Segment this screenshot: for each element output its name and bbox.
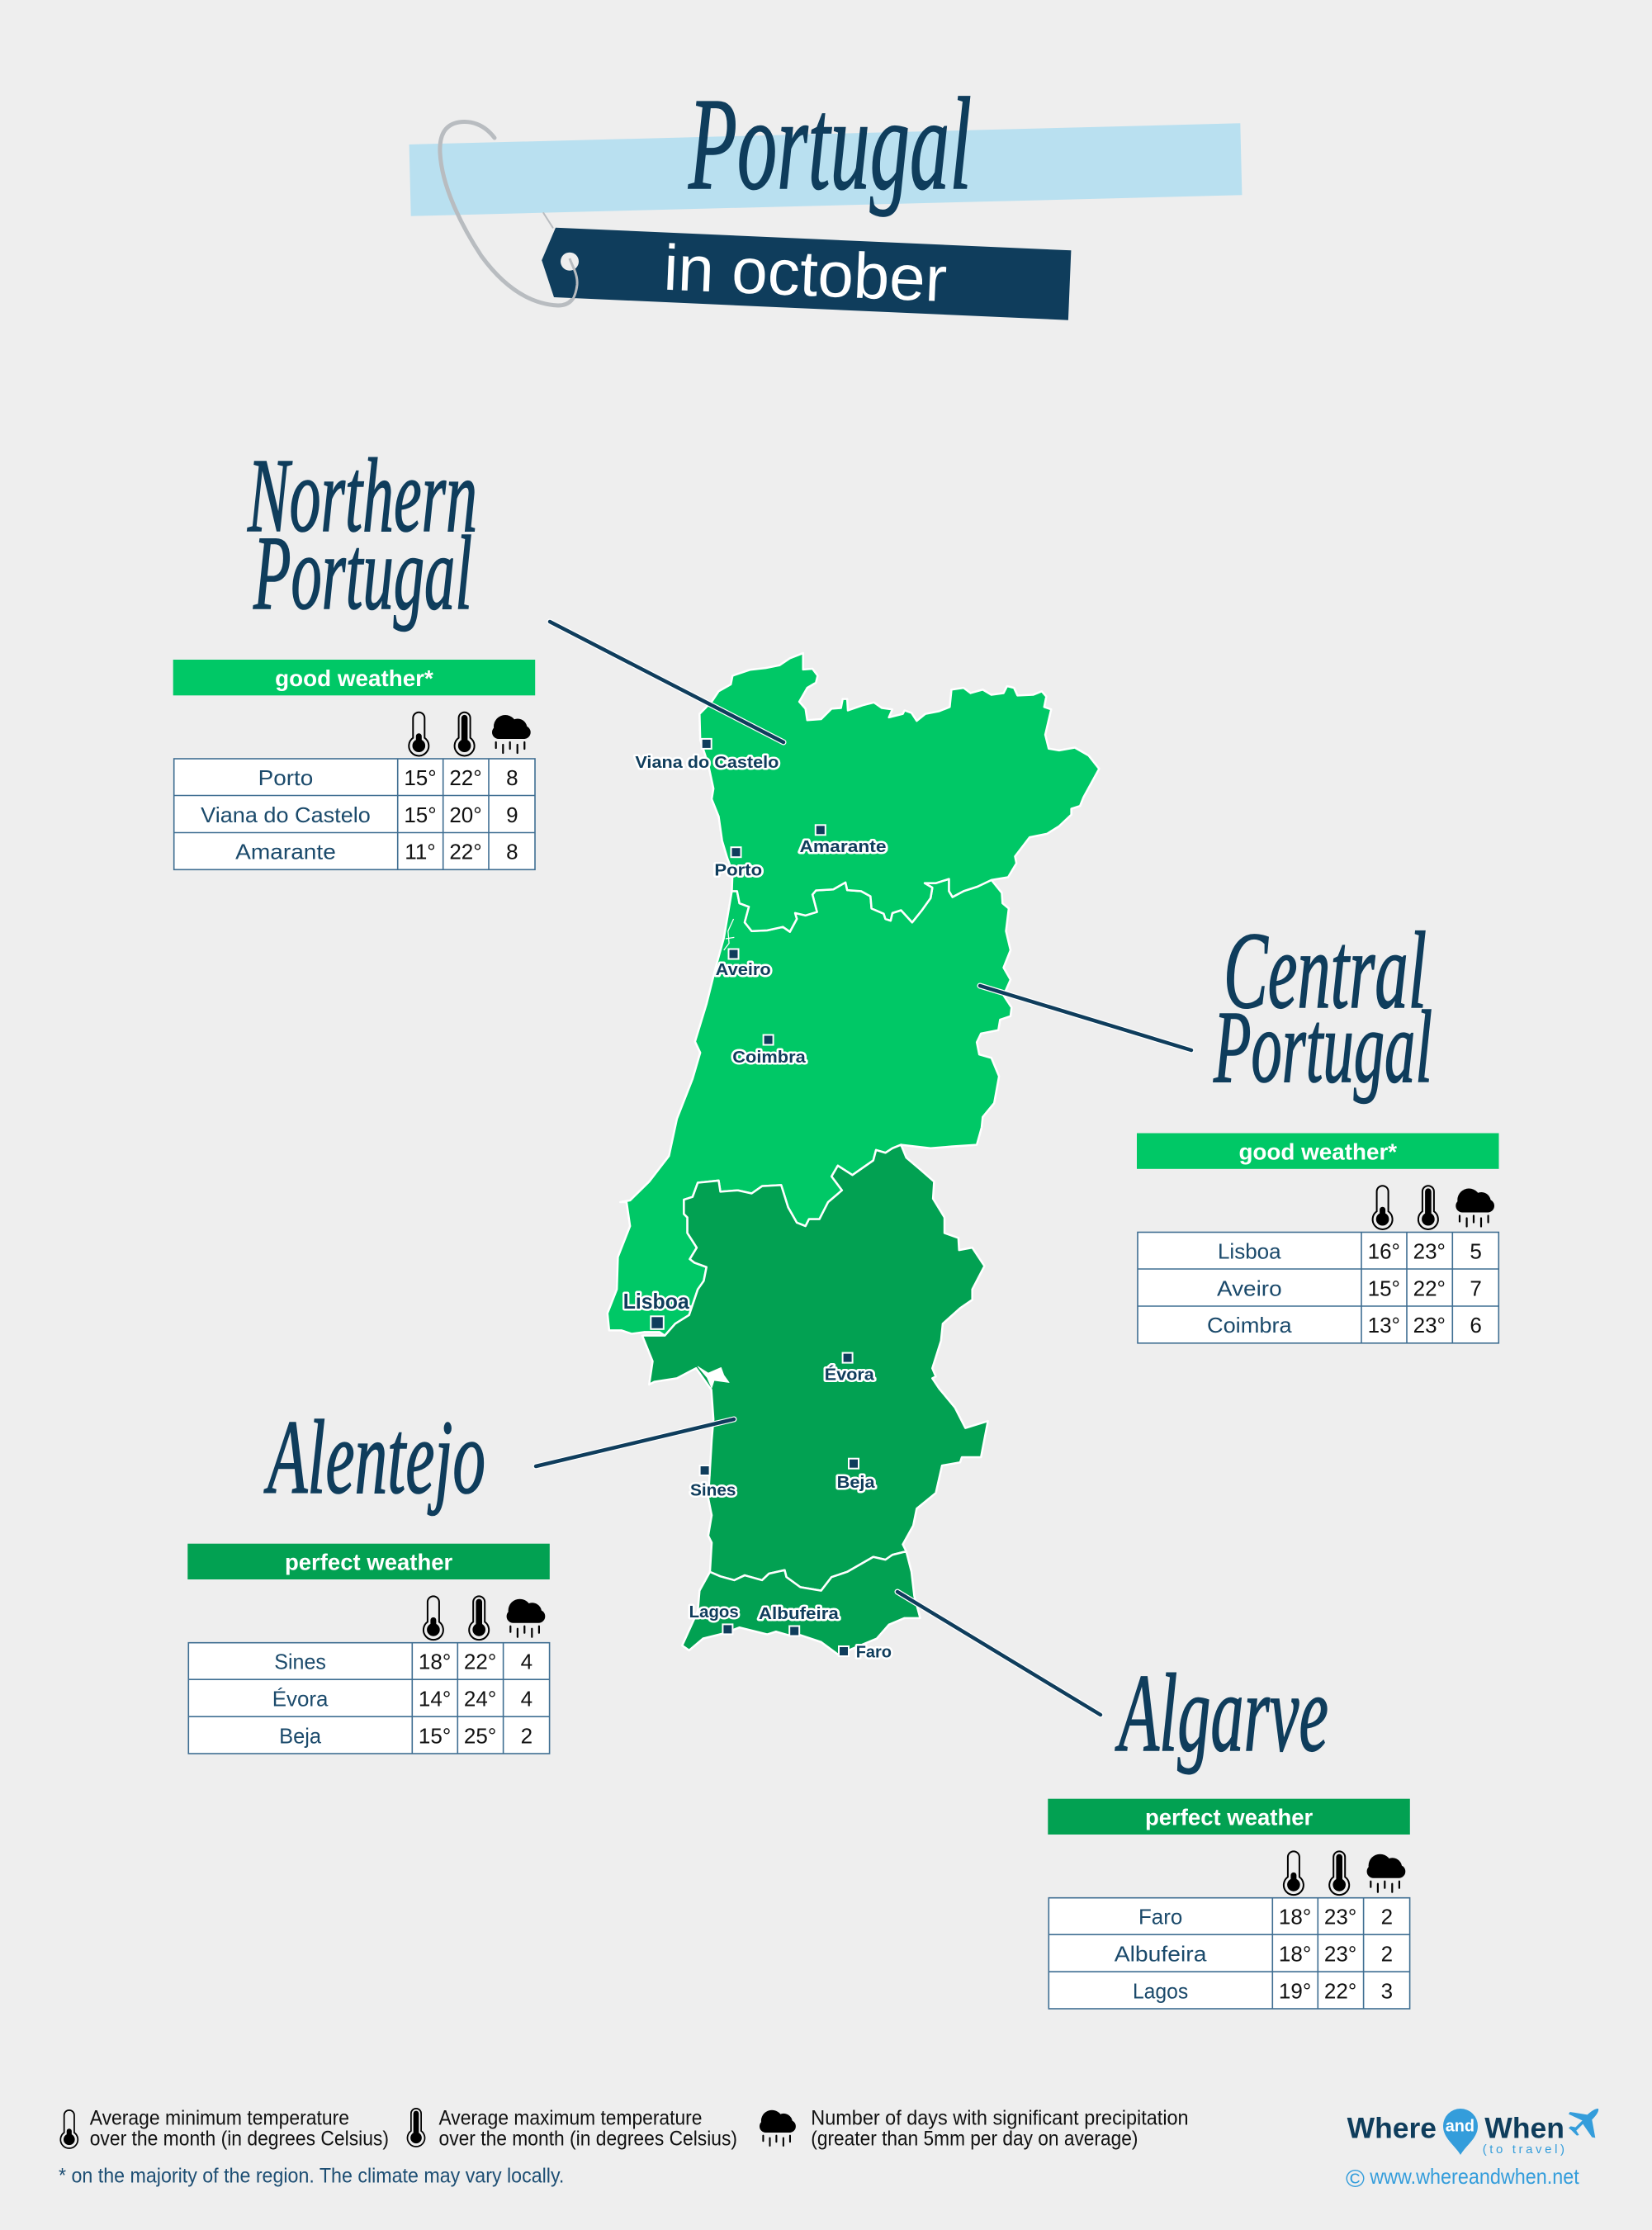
city marker: Viana do Castelo: Viana do Castelo bbox=[635, 754, 779, 772]
footnote: * on the majority of the region. The climate may vary locally. bbox=[59, 2164, 564, 2187]
weather bar: good weather: good weather* bbox=[275, 665, 433, 691]
website: www.whereandwhen.net bbox=[1369, 2164, 1579, 2189]
row: Faro: 2 bbox=[1381, 1905, 1393, 1929]
city marker: Lagos: Lagos bbox=[689, 1603, 739, 1622]
leader line: Northern Portugal bbox=[550, 622, 783, 742]
logo words: Where bbox=[1347, 2112, 1437, 2144]
row: Évora: Évora bbox=[272, 1687, 329, 1712]
row: Lisboa: Lisboa bbox=[1218, 1238, 1281, 1263]
row: Coimbra bbox=[1207, 1313, 1482, 1338]
Aveiro lagoon bbox=[724, 919, 734, 950]
weather bar: good weather: good weather* bbox=[1238, 1139, 1397, 1164]
row: Porto bbox=[258, 765, 518, 790]
city marker: Évora: Évora bbox=[825, 1366, 875, 1385]
subtitle: in october: in october bbox=[662, 231, 949, 315]
row: Viana do Castelo: Viana do Castelo bbox=[201, 803, 371, 827]
table icons bbox=[424, 1596, 545, 1640]
panel: Alentejo bbox=[187, 1399, 550, 1754]
row: Amarante bbox=[235, 840, 518, 864]
panel: Algarve bbox=[1048, 1652, 1410, 2009]
city marker: Amarante bbox=[799, 826, 887, 856]
row: Lagos: 3 bbox=[1381, 1978, 1393, 2003]
city marker: Faro: Faro bbox=[856, 1643, 892, 1661]
title band bbox=[409, 123, 1242, 216]
row: Amarante: 11° bbox=[405, 840, 436, 864]
city marker: Lisboa: Lisboa bbox=[623, 1289, 689, 1314]
region: Central Portugal bbox=[608, 879, 1011, 1336]
row: Sines: 18° bbox=[419, 1650, 451, 1674]
row: Albufeira: 2 bbox=[1381, 1942, 1393, 1967]
weather bar: perfect weather: perfect weather bbox=[285, 1550, 452, 1575]
legend: maximum temperature: over the month (in degrees Celsius) bbox=[439, 2127, 737, 2150]
city marker: Coimbra bbox=[732, 1035, 807, 1067]
city marker: Beja bbox=[837, 1460, 876, 1492]
row: Lagos: 22° bbox=[1324, 1978, 1356, 2003]
row: Aveiro: 7 bbox=[1470, 1276, 1482, 1301]
row: Lagos bbox=[1133, 1978, 1393, 2003]
legend: precipitation: Number of days with significant precipitation bbox=[811, 2106, 1189, 2129]
row: Beja: 25° bbox=[464, 1723, 496, 1748]
logo words bbox=[1347, 2112, 1564, 2144]
weather bar: perfect weather bbox=[1048, 1799, 1410, 1835]
row: Sines: 22° bbox=[464, 1650, 496, 1674]
row: Albufeira: 18° bbox=[1279, 1942, 1311, 1967]
row: Coimbra: 23° bbox=[1413, 1313, 1446, 1338]
region: Northern Portugal bbox=[699, 653, 1099, 932]
weather table bbox=[188, 1643, 550, 1754]
row: Coimbra: 6 bbox=[1470, 1313, 1482, 1338]
city marker: Sines bbox=[690, 1466, 736, 1500]
row: Albufeira: Albufeira bbox=[1115, 1942, 1207, 1967]
row: Faro: 23° bbox=[1324, 1905, 1356, 1929]
weather table bbox=[1138, 1232, 1498, 1343]
logo words: When bbox=[1484, 2112, 1564, 2144]
panel body bbox=[1137, 1133, 1499, 1343]
title block bbox=[409, 70, 1242, 320]
logo: Where and When bbox=[1346, 2109, 1598, 2193]
weather bar: good weather bbox=[173, 660, 535, 695]
leader line: Alentejo bbox=[536, 1419, 734, 1466]
heading: Central Portugal: Portugal bbox=[1213, 991, 1432, 1105]
city marker: Porto bbox=[714, 848, 762, 879]
map of Portugal bbox=[536, 622, 1191, 1715]
tag hole bbox=[561, 253, 579, 271]
row: Coimbra: Coimbra bbox=[1207, 1313, 1292, 1338]
legend: minimum temperature: Average minimum temperature bbox=[90, 2106, 349, 2129]
weather bar: perfect weather bbox=[187, 1544, 550, 1579]
regions bbox=[608, 653, 1099, 1655]
row: Porto: 22° bbox=[449, 765, 482, 790]
row: Lisboa: 5 bbox=[1470, 1238, 1482, 1263]
heading: Northern Portugal: Northern bbox=[247, 437, 477, 554]
Sado estuary bbox=[698, 1366, 729, 1388]
row: Évora: 4 bbox=[521, 1687, 533, 1712]
heading: Alentejo: Alentejo bbox=[264, 1399, 485, 1516]
leader line: Algarve bbox=[897, 1592, 1101, 1715]
city marker: Évora bbox=[825, 1354, 875, 1385]
row: Aveiro: 15° bbox=[1368, 1276, 1400, 1301]
row: Beja: 15° bbox=[419, 1723, 451, 1748]
city marker: Coimbra: Coimbra bbox=[732, 1049, 807, 1067]
row: Amarante: Amarante bbox=[235, 840, 336, 864]
legend bbox=[59, 2106, 1189, 2187]
legend: precipitation: (greater than 5mm per day on average) bbox=[811, 2127, 1138, 2150]
city marker: Beja: Beja bbox=[837, 1474, 876, 1492]
row: Lisboa bbox=[1218, 1238, 1482, 1263]
row: Sines: Sines bbox=[274, 1650, 326, 1674]
row: Porto: Porto bbox=[258, 765, 313, 790]
region: Alentejo bbox=[642, 1145, 988, 1591]
row: Amarante: 8 bbox=[506, 840, 518, 864]
heading: Algarve: Algarve bbox=[1115, 1652, 1328, 1775]
tag string bbox=[440, 122, 577, 305]
row: Aveiro: Aveiro bbox=[1217, 1276, 1282, 1301]
logo pin bbox=[1443, 2109, 1478, 2155]
row: Viana do Castelo: 15° bbox=[404, 803, 437, 827]
city marker: Albufeira: Albufeira bbox=[759, 1605, 840, 1623]
logo plane bbox=[1569, 2109, 1598, 2138]
row: Albufeira bbox=[1115, 1942, 1393, 1967]
title: Portugal: Portugal bbox=[688, 70, 972, 217]
logo words: and bbox=[1446, 2118, 1474, 2136]
row: Viana do Castelo bbox=[201, 803, 518, 827]
legend: minimum temperature: over the month (in degrees Celsius) bbox=[90, 2127, 389, 2150]
row: Viana do Castelo: 9 bbox=[506, 803, 518, 827]
city marker: Aveiro: Aveiro bbox=[716, 961, 771, 979]
city marker: Aveiro bbox=[716, 949, 771, 979]
legend: maximum temperature: Average maximum temperature bbox=[439, 2106, 702, 2129]
row: Sines: 4 bbox=[521, 1650, 533, 1674]
table icons bbox=[1284, 1851, 1405, 1895]
panel body bbox=[1048, 1799, 1410, 2009]
heading: Northern Portugal bbox=[247, 437, 477, 632]
city marker: Lisboa bbox=[623, 1289, 689, 1328]
city marker: Lagos bbox=[689, 1603, 739, 1633]
weather table bbox=[1048, 1898, 1410, 2009]
weather table bbox=[174, 759, 535, 869]
legend: minimum temperature bbox=[60, 2106, 389, 2150]
city marker: Sines: Sines bbox=[690, 1482, 736, 1500]
city marker: Albufeira bbox=[759, 1605, 840, 1635]
row: Faro bbox=[1138, 1905, 1393, 1929]
row: Évora: 14° bbox=[419, 1687, 451, 1712]
logo tagline: (to travel) bbox=[1483, 2142, 1564, 2157]
row: Lisboa: 23° bbox=[1413, 1238, 1446, 1263]
row: Beja: Beja bbox=[279, 1723, 322, 1748]
city marker: Faro bbox=[840, 1643, 892, 1661]
city marker: Viana do Castelo bbox=[635, 740, 779, 772]
row: Beja: 2 bbox=[521, 1723, 533, 1748]
row: Porto: 15° bbox=[404, 765, 437, 790]
legend: precipitation bbox=[760, 2106, 1189, 2150]
row: Évora bbox=[272, 1687, 533, 1712]
row: Viana do Castelo: 20° bbox=[449, 803, 482, 827]
row: Aveiro bbox=[1217, 1276, 1482, 1301]
tag string front bbox=[561, 258, 577, 305]
legend: maximum temperature bbox=[408, 2106, 737, 2150]
heading: Central Portugal: Central bbox=[1224, 909, 1427, 1031]
row: Faro: Faro bbox=[1138, 1905, 1182, 1929]
row: Amarante: 22° bbox=[449, 840, 482, 864]
row: Lagos: 19° bbox=[1279, 1978, 1311, 2003]
row: Évora: 24° bbox=[464, 1687, 496, 1712]
row: Faro: 18° bbox=[1279, 1905, 1311, 1929]
city marker: Porto: Porto bbox=[714, 861, 762, 879]
row: Albufeira: 23° bbox=[1324, 1942, 1356, 1967]
copyright mark: © bbox=[1346, 2166, 1365, 2193]
weather bar: perfect weather: perfect weather bbox=[1145, 1805, 1313, 1830]
row: Beja bbox=[279, 1723, 533, 1748]
row: Lagos: Lagos bbox=[1133, 1978, 1188, 2003]
heading: Northern Portugal: Portugal bbox=[253, 514, 472, 632]
table icons bbox=[409, 713, 531, 755]
tag shape bbox=[542, 228, 1071, 320]
row: Sines bbox=[274, 1650, 533, 1674]
row: Coimbra: 13° bbox=[1368, 1313, 1400, 1338]
panel: Northern Portugal bbox=[173, 437, 535, 869]
row: Lisboa: 16° bbox=[1368, 1238, 1400, 1263]
weather bar: good weather bbox=[1137, 1133, 1499, 1169]
panel body bbox=[187, 1544, 550, 1754]
leader line: Central Portugal bbox=[980, 986, 1191, 1050]
city marker: Amarante: Amarante bbox=[799, 838, 887, 856]
row: Aveiro: 22° bbox=[1413, 1276, 1446, 1301]
table icons bbox=[1373, 1186, 1494, 1229]
heading: Central Portugal bbox=[1213, 909, 1432, 1105]
panel: Central Portugal bbox=[1137, 909, 1499, 1343]
region: Algarve bbox=[682, 1551, 921, 1655]
row: Porto: 8 bbox=[506, 765, 518, 790]
